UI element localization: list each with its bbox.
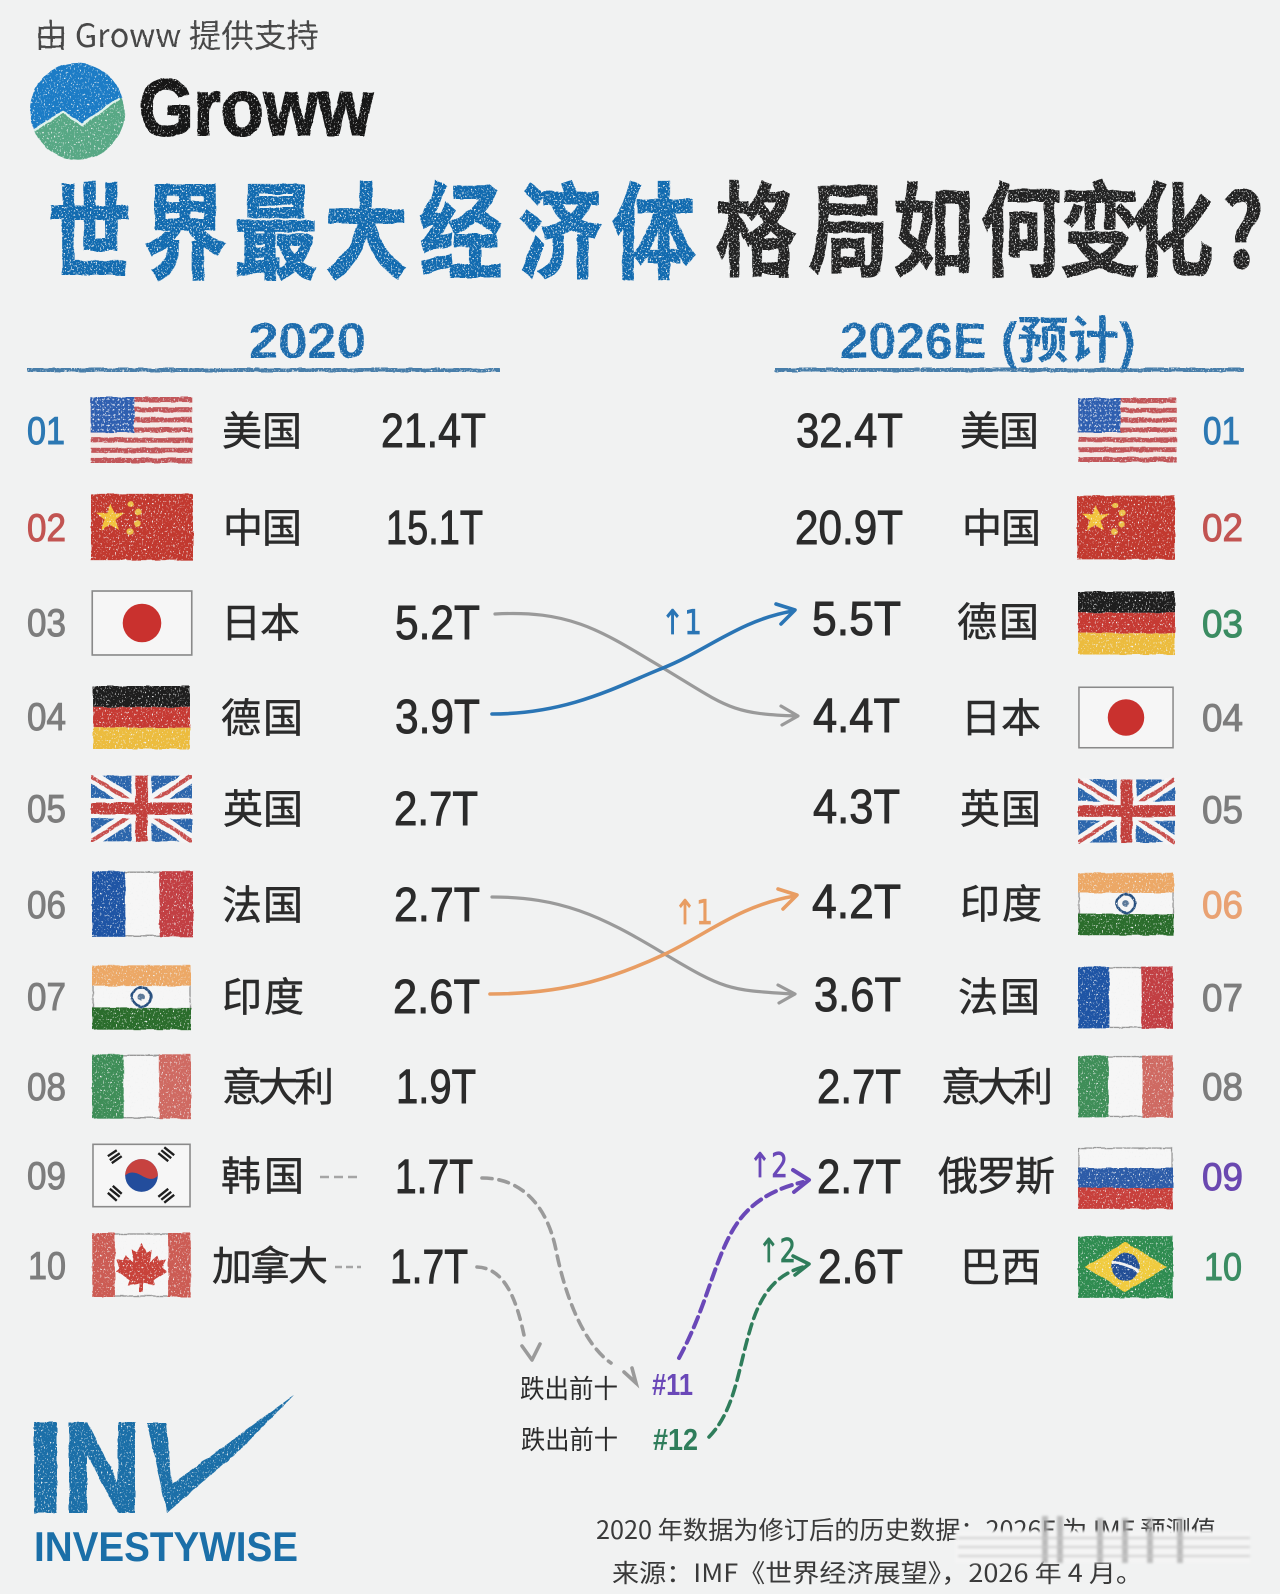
row 02 China: [795, 496, 1243, 559]
row 05 UK: 05: [27, 788, 66, 831]
row 01 USA: 21.4T: [381, 405, 486, 458]
row 02 China: 20.9T: [795, 502, 903, 555]
arrow: South Korea drops out: [482, 1178, 636, 1383]
row 03 Japan: 03: [27, 602, 66, 645]
label: dropped out top ten, rank 12: 跌出前十: [521, 1420, 618, 1457]
row 01 USA: 01: [27, 410, 65, 453]
label: dropped out top ten, rank 11: 跌出前十: [520, 1369, 618, 1406]
heading: 2026E: 2026E (预计): [840, 313, 1136, 369]
row 10 Brazil: 10: [1204, 1246, 1242, 1289]
icon: Groww logo: [30, 63, 125, 160]
row 03 Germany: 5.5T: [812, 593, 901, 646]
arrow: Russia rises: [679, 1170, 809, 1358]
row 07 India: 07: [27, 976, 66, 1019]
label: dropped out top ten, rank 12: [521, 1420, 698, 1457]
watermark smear: [955, 1516, 1250, 1563]
row 09 South Korea: 韩国: [221, 1144, 304, 1202]
row 10 Brazil: 巴西: [960, 1235, 1041, 1293]
arrow: Canada drops out: [477, 1267, 540, 1360]
title blue part: 世界最大经济体: [48, 151, 695, 301]
row 09 Russia: 2.7T: [817, 1151, 901, 1204]
sponsor line: 由 Groww 提供支持: [35, 11, 319, 57]
row 10 Brazil: 2.6T: [818, 1241, 903, 1294]
wordmark: INVESTYWISE: [34, 1523, 298, 1570]
row 04 Japan: 4.4T: [813, 690, 900, 743]
footnote line two: 来源：IMF《世界经济展望》，2026 年 4 月。: [612, 1554, 1143, 1590]
row 06 France: 2.7T: [394, 879, 480, 932]
row 08 Italy: 意大利: [222, 1055, 334, 1113]
row 06 India: 06: [1202, 884, 1243, 927]
row 07 India: [27, 965, 480, 1030]
row 02 China: 15.1T: [386, 502, 483, 555]
row 02 China: 中国: [962, 496, 1041, 554]
row 01 USA: 32.4T: [796, 405, 903, 458]
row 06 India: [812, 872, 1243, 935]
row 07 France: 07: [1202, 977, 1243, 1020]
row 02 China: 02: [27, 507, 66, 550]
row 04 Japan: 日本: [961, 686, 1041, 744]
row 08 Italy: [817, 1055, 1243, 1117]
row 06 India: 4.2T: [812, 876, 901, 929]
row 01 USA: [796, 398, 1240, 462]
row 01 USA: 01: [1203, 410, 1240, 453]
Groww wordmark: Groww: [139, 63, 374, 152]
row 04 Japan: 04: [1202, 697, 1243, 740]
row 09 Russia: 俄罗斯: [938, 1144, 1055, 1202]
row 06 India: 印度: [960, 872, 1042, 930]
underline: 2020: [27, 368, 500, 372]
row 09 South Korea: [27, 1144, 473, 1207]
label: dropped out top ten, rank 11: [520, 1367, 693, 1406]
row 02 China: 02: [1202, 507, 1243, 550]
row 09 South Korea: 09: [27, 1155, 66, 1198]
row 05 UK: 4.3T: [813, 781, 900, 834]
right column: 2026E ranking: [795, 398, 1243, 1298]
heading: 2020: 2020: [249, 313, 366, 369]
row 08 Italy: 意大利: [941, 1055, 1053, 1113]
row 07 India: 2.6T: [393, 971, 480, 1024]
logo: Investywise: [34, 1395, 298, 1570]
row 06 France: [27, 871, 480, 937]
label: up 2 green: ↑2: [758, 1231, 796, 1270]
row 02 China: 中国: [223, 496, 302, 554]
row 03 Germany: [812, 590, 1243, 655]
underline: 2026E: [775, 368, 1244, 372]
row 04 Germany: [27, 686, 480, 749]
row 05 UK: [813, 777, 1243, 843]
row 01 USA: 美国: [222, 399, 302, 457]
row 05 UK: 英国: [223, 777, 303, 835]
row 10 Canada: 10: [28, 1245, 66, 1288]
row 08 Italy: 08: [1202, 1066, 1243, 1109]
row 04 Germany: 德国: [221, 686, 303, 744]
footnote line one: 2020 年数据为修订后的历史数据：2026E 为 IMF 预测值: [596, 1511, 1216, 1547]
row 08 Italy: [27, 1054, 476, 1119]
row 04 Japan: [813, 686, 1243, 748]
row 05 UK: 英国: [960, 777, 1041, 835]
row 05 UK: 05: [1202, 789, 1243, 832]
row 06 France: 法国: [222, 873, 303, 931]
row 02 China: [27, 494, 483, 560]
row 03 Germany: 03: [1202, 603, 1243, 646]
row 07 France: 3.6T: [814, 969, 901, 1022]
title black part: 格局如何变化?: [715, 150, 1264, 298]
row 07 France: [814, 965, 1243, 1028]
row 06 France: 06: [27, 884, 66, 927]
row 01 USA: 美国: [960, 399, 1039, 457]
row 01 USA: [27, 397, 486, 463]
arrow: Brazil rises: [709, 1256, 809, 1437]
arrow: Germany rises from 4 to 3: [492, 604, 795, 714]
row 10 Canada: [28, 1233, 468, 1297]
row 05 UK: [27, 776, 478, 841]
row 09 South Korea: 1.7T: [395, 1151, 473, 1204]
left column: 2020 ranking: [27, 397, 486, 1297]
row 07 France: 法国: [958, 965, 1040, 1023]
row 03 Japan: 5.2T: [395, 597, 480, 650]
arrow: Japan falls from 3 to 4: [495, 613, 798, 725]
label: up 1 orange: ↑1: [674, 893, 713, 933]
INV mark: [34, 1395, 294, 1513]
row 09 Russia: 09: [1202, 1156, 1243, 1199]
row 10 Canada: 加拿大: [212, 1234, 328, 1292]
label: dropped out top ten, rank 12: #12: [653, 1422, 698, 1457]
row 08 Italy: 1.9T: [396, 1061, 476, 1114]
row 04 Germany: 3.9T: [395, 691, 480, 744]
label: dropped out top ten, rank 11: #11: [652, 1367, 693, 1402]
label: up 2 purple: ↑2: [749, 1146, 788, 1186]
arrow: France falls from 6 to 7: [492, 897, 795, 1003]
row 08 Italy: 2.7T: [817, 1061, 901, 1114]
arrow: India rises from 7 to 6: [490, 889, 797, 994]
row 05 UK: 2.7T: [394, 783, 478, 836]
row 03 Japan: [27, 591, 480, 655]
row 08 Italy: 08: [27, 1066, 66, 1109]
row 04 Germany: 04: [27, 696, 66, 739]
row 10 Brazil: [818, 1235, 1242, 1298]
label: up 1 blue: ↑1: [661, 603, 702, 643]
title: [48, 150, 1264, 301]
row 03 Germany: 德国: [957, 590, 1039, 648]
row 09 Russia: [817, 1144, 1243, 1209]
row 07 India: 印度: [222, 965, 304, 1023]
row 10 Canada: 1.7T: [390, 1241, 468, 1294]
row 03 Japan: 日本: [221, 591, 300, 649]
